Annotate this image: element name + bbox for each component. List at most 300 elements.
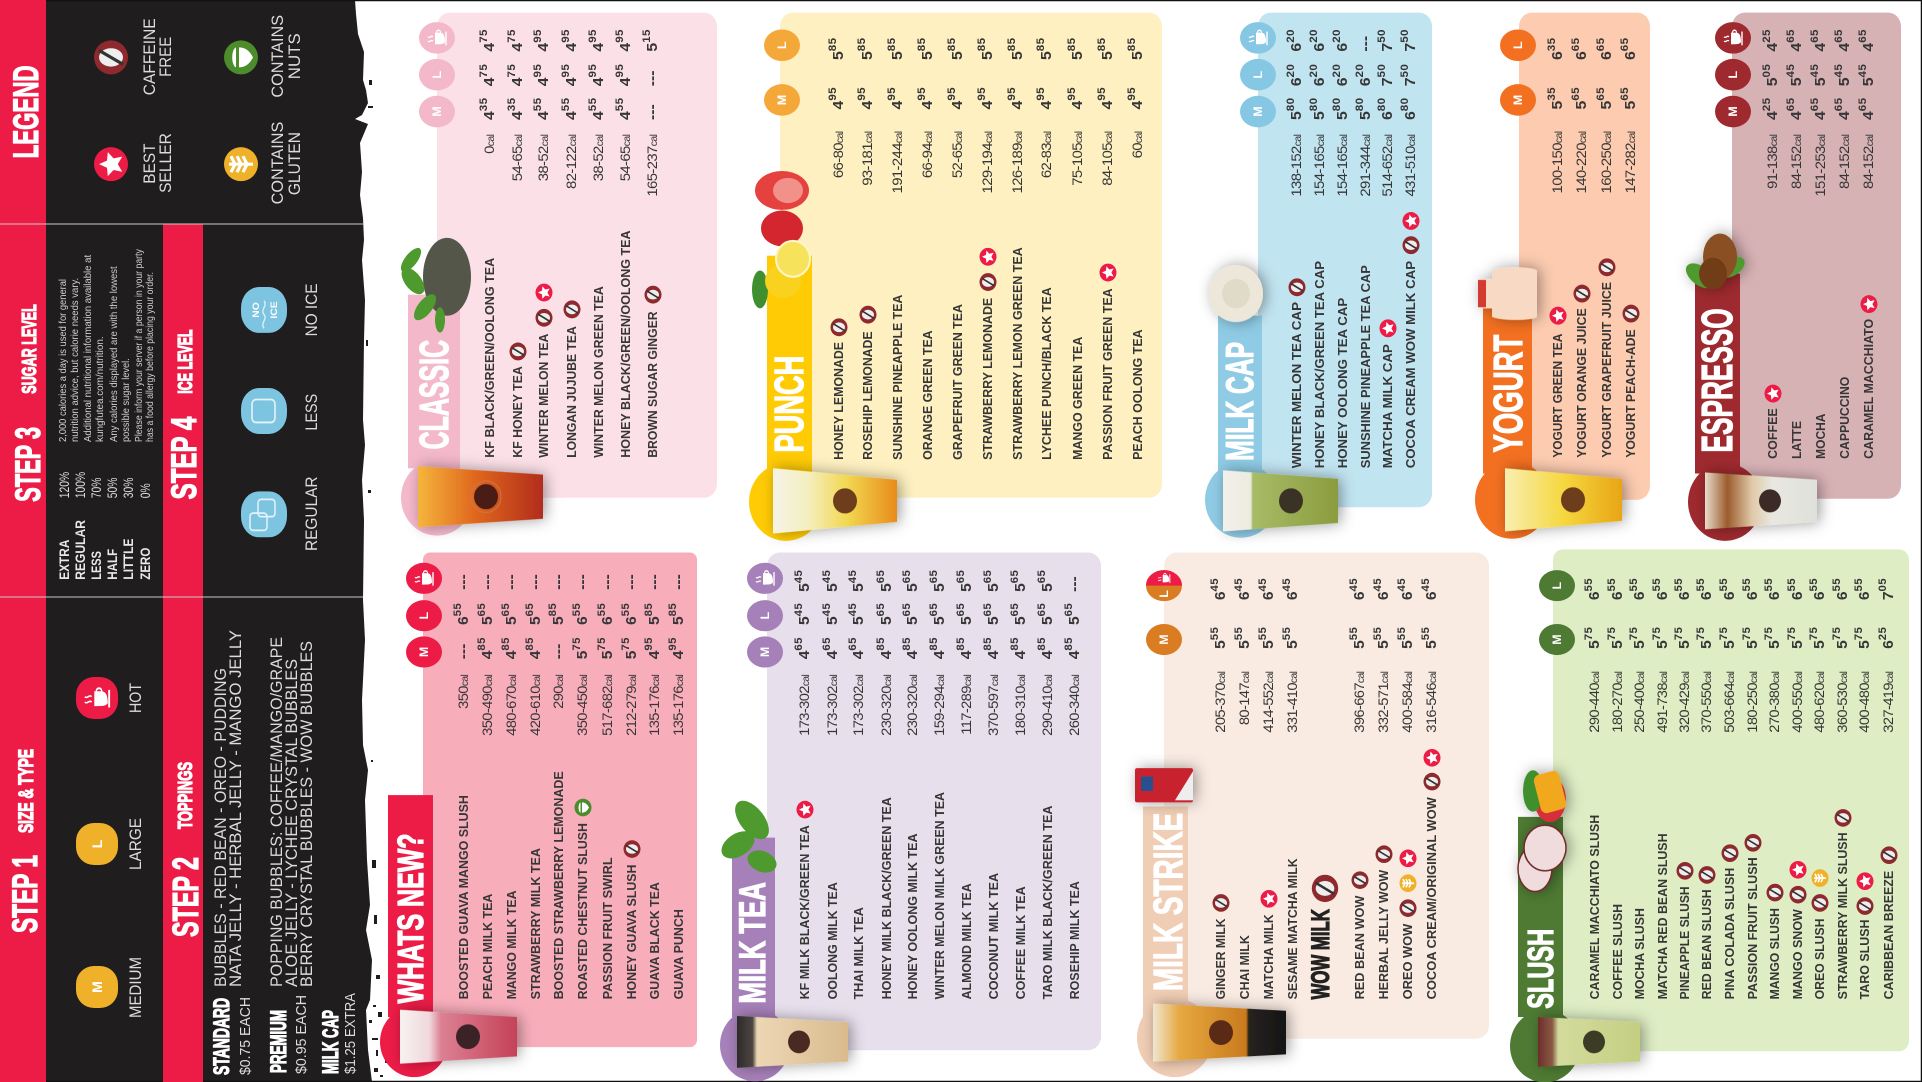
row: red bean wow: 396-667cal — [1352, 671, 1368, 733]
row: honey milk black green tea: 85 — [875, 637, 887, 651]
row: pineapple slush: 55 — [1673, 578, 1685, 591]
row: coffee: 4 — [1764, 43, 1781, 52]
row: yogurt green tea: 6 — [1549, 51, 1566, 60]
row: passion fruit slush: 75 — [1741, 627, 1753, 640]
row: cocoa cream wow milk cap: 7 — [1402, 78, 1419, 86]
row: rosehip lemonade: 85 — [856, 37, 868, 51]
row: strawberry lemonade: 129-194cal — [980, 131, 996, 193]
nutrition note: Please inform your server if a person in your party — [134, 249, 145, 442]
row: cocoa cream original wow: 6 — [1423, 591, 1440, 600]
row: winter melon milk green tea: 65 — [928, 603, 940, 616]
row: cocoa cream wow milk cap: 50 — [1399, 29, 1411, 43]
row: peach milk tea: 4 — [479, 651, 496, 659]
row: caribbean breeze — [1877, 578, 1898, 999]
row: matcha red bean slush: 6 — [1654, 591, 1671, 600]
row: honey lemonade: 66-80cal — [831, 131, 847, 178]
row: longan jujube tea: 95 — [560, 64, 572, 78]
row: sesame matcha milk: 45 — [1281, 578, 1293, 591]
row: caramel macchiato — [1857, 29, 1878, 459]
row: caribbean breeze: 7 — [1880, 591, 1897, 600]
card background — [437, 13, 717, 498]
row: passion fruit green tea: 5 — [1099, 51, 1116, 60]
row: kf honey tea — [506, 29, 526, 458]
row: sesame matcha milk: 5 — [1284, 640, 1301, 649]
label: caffeine free: FREE — [155, 37, 175, 77]
row: taro milk black green tea: 290-410cal — [1040, 674, 1056, 736]
row: oreo wow: 45 — [1396, 578, 1408, 591]
row: taro milk black green tea: 85 — [1036, 637, 1048, 651]
row: taro milk black green tea: 5 — [1039, 616, 1056, 625]
title band — [380, 795, 448, 1077]
row: winter melon tea: 95 — [532, 29, 544, 43]
row: kf milk black green tea: 4 — [796, 651, 813, 659]
row: kf honey tea: 4 — [509, 78, 526, 86]
row: longan jujube tea: 95 — [560, 29, 572, 43]
row: honey milk black green tea: 65 — [875, 603, 887, 616]
row: honey oolong tea cap: 154-165cal — [1335, 134, 1351, 197]
row: winter melon green tea: 4 — [590, 43, 607, 52]
row: cappuccino: 65 — [1833, 29, 1845, 43]
row: guava black tea: 135-176cal — [647, 674, 663, 736]
row: boosted guava mango slush — [452, 574, 472, 999]
size badges: L — [1251, 70, 1265, 79]
row: sesame matcha milk: 331-410cal — [1285, 671, 1301, 733]
row: herbal jelly wow: 55 — [1372, 627, 1384, 640]
row: strawberry lemon green tea: 126-189cal — [1010, 131, 1026, 193]
row: grapefruit green tea: 85 — [946, 37, 958, 51]
row: mango slush: 270-380cal — [1767, 671, 1783, 733]
row: winter melon milk green tea: 65 — [928, 570, 940, 583]
row: honey oolong milk tea: 65 — [901, 603, 913, 616]
row: latte: 65 — [1785, 97, 1797, 111]
row: strawberry milk tea: 5 — [527, 616, 544, 625]
ingredient: coffee beans — [1682, 234, 1748, 293]
panel: yogurt — [1475, 13, 1650, 539]
row: winter melon tea cap: 80 — [1285, 97, 1297, 111]
row: cocoa cream wow milk cap: 6 — [1402, 111, 1419, 120]
row: pineapple slush: 6 — [1676, 591, 1693, 600]
row: passion fruit swirl — [596, 574, 616, 999]
row: pina colada slush: 503-664cal — [1722, 671, 1738, 733]
row: oreo slush: 480-620cal — [1812, 671, 1828, 733]
row: winter melon milk green tea: 5 — [931, 616, 948, 625]
row: cocoa cream original wow: 5 — [1423, 640, 1440, 649]
row: honey black green tea cap — [1308, 29, 1328, 468]
row: kf milk black green tea: 45 — [793, 603, 805, 616]
row: honey guava slush: HONEY GUAVA SLUSH — [624, 865, 639, 999]
heading: step 1: STEP 1 — [6, 855, 45, 933]
row: taro slush: 55 — [1853, 578, 1865, 591]
row: passion fruit swirl: 5 — [599, 651, 616, 659]
row: winter melon tea cap: 20 — [1285, 64, 1297, 78]
row: lychee punch black tea: 62-83cal — [1039, 131, 1055, 178]
row: yogurt orange juice: YOGURT ORANGE JUICE — [1574, 308, 1589, 458]
row: matcha milk: 6 — [1260, 591, 1277, 600]
row: coffee milk tea: 85 — [1009, 637, 1021, 651]
row: honey lemonade: 85 — [827, 37, 839, 51]
row: passion fruit green tea: 85 — [1096, 37, 1108, 51]
row: winter melon tea: 95 — [532, 64, 544, 78]
row: mocha: 65 — [1809, 97, 1821, 111]
title: PUNCH — [766, 356, 812, 452]
row: coconut milk tea: 65 — [982, 570, 994, 583]
row: oolong milk tea: 173-302cal — [825, 674, 841, 736]
row: peach milk tea: 350-490cal — [480, 674, 496, 736]
row: mango milk tea: 65 — [500, 603, 512, 616]
row: guava punch: 4 — [670, 651, 687, 659]
row: guava black tea: 4 — [646, 651, 663, 659]
row: strawberry milk slush: 55 — [1831, 578, 1843, 591]
card background — [1164, 552, 1489, 1039]
row: honey oolong tea cap: 5 — [1334, 111, 1351, 120]
row: rosehip lemonade — [856, 37, 876, 460]
row: boosted guava mango slush: 55 — [452, 603, 464, 616]
row: almond milk tea: 5 — [958, 616, 975, 625]
item list — [827, 37, 1146, 460]
row: sunshine pineapple tea: SUNSHINE PINEAPPLE TEA — [890, 294, 905, 460]
row: longan jujube tea — [560, 29, 580, 458]
row: cappuccino: CAPPUCCINO — [1837, 377, 1852, 459]
drink cup — [737, 1016, 848, 1068]
row: kf honey tea: 35 — [506, 97, 518, 111]
row: sunshine pineapple tea cap: 80 — [1354, 97, 1366, 111]
row: matcha milk: MATCHA MILK — [1261, 914, 1276, 999]
row: oolong milk tea: 5 — [824, 583, 841, 592]
row: honey oolong tea cap: 6 — [1334, 78, 1351, 86]
row: caribbean breeze: 327-419cal — [1881, 671, 1897, 733]
row: guava punch — [667, 574, 687, 999]
ingredient: tea leaves — [717, 795, 780, 877]
row: passion fruit green tea: 95 — [1096, 87, 1108, 101]
row: mocha slush: 250-400cal — [1632, 671, 1648, 733]
row: thai milk tea: 45 — [847, 570, 859, 583]
row: winter melon green tea: 38-52cal — [591, 134, 607, 181]
row: red bean slush: 5 — [1698, 640, 1715, 649]
size badges: M — [1511, 95, 1525, 105]
row: yogurt orange juice: 5 — [1573, 101, 1590, 109]
row: herbal jelly wow: HERBAL JELLY WOW — [1376, 869, 1391, 999]
row: oolong milk tea: 45 — [821, 570, 833, 583]
row: oreo slush: 6 — [1811, 591, 1828, 600]
row: taro milk black green tea: TARO MILK BLACK/GREEN TEA — [1040, 805, 1055, 999]
row: taro milk black green tea: 65 — [1036, 603, 1048, 616]
row: guava black tea: 5 — [646, 616, 663, 625]
row: grapefruit green tea: 95 — [946, 87, 958, 101]
row: oreo wow — [1396, 578, 1416, 999]
row: almond milk tea: 117-289cal — [959, 674, 975, 735]
item list — [1583, 578, 1898, 999]
row: cocoa cream original wow: 316-546cal — [1424, 671, 1440, 733]
row: thai milk tea — [847, 570, 867, 999]
panel: milk cap — [1205, 13, 1432, 538]
row: cappuccino: 65 — [1833, 97, 1845, 111]
row: yogurt grapefruit juice: 6 — [1598, 51, 1615, 60]
row: mango milk tea: 4 — [503, 651, 520, 659]
size badges — [747, 563, 783, 668]
row: matcha red bean slush — [1651, 578, 1671, 999]
row: honey black green tea cap: 80 — [1308, 97, 1320, 111]
drink cup — [1223, 470, 1338, 531]
sugar level table: 100% — [73, 472, 89, 498]
row: honey lemonade — [827, 37, 848, 460]
row: honey guava slush: 6 — [623, 616, 640, 625]
row: passion fruit slush: PASSION FRUIT SLUSH — [1745, 857, 1760, 999]
size badges — [764, 29, 800, 116]
row: guava punch: --- — [670, 574, 687, 590]
row: chai milk: 80-147cal — [1237, 671, 1253, 725]
row: roasted chestnut slush: 55 — [571, 603, 583, 616]
row: coffee slush: 180-270cal — [1610, 671, 1626, 733]
row: passion fruit slush: 55 — [1741, 578, 1753, 591]
row: coffee: 5 — [1764, 78, 1781, 86]
panel: milk strike — [1135, 552, 1489, 1077]
row: mango snow: 75 — [1786, 627, 1798, 640]
row: mango green tea: 95 — [1066, 87, 1078, 101]
icon: no ice: NO — [252, 302, 262, 318]
row: roasted chestnut slush: 350-450cal — [575, 674, 591, 736]
row: cocoa cream wow milk cap: 7 — [1402, 43, 1419, 52]
row: peach milk tea: PEACH MILK TEA — [480, 893, 495, 999]
size badges: L — [758, 611, 772, 619]
row: thai milk tea: 65 — [847, 637, 859, 651]
row: oreo wow: 400-584cal — [1400, 671, 1416, 733]
row: rosehip milk tea — [1063, 576, 1083, 999]
panel: espresso — [1682, 13, 1901, 541]
size badges: M — [758, 647, 772, 657]
row: yogurt peach-ade: 65 — [1619, 37, 1631, 51]
row: coffee: 25 — [1761, 97, 1773, 111]
row: matcha red bean slush: 55 — [1651, 578, 1663, 591]
ingredient: tea leaves — [397, 238, 471, 333]
row: strawberry lemonade: 85 — [976, 37, 988, 51]
red strip: second level headers — [163, 224, 203, 1082]
row: matcha milk cap: 80 — [1376, 97, 1388, 111]
row: rosehip lemonade: 5 — [859, 51, 876, 60]
size badges: L — [1550, 581, 1564, 589]
row: peach oolong tea — [1126, 37, 1146, 460]
size labels — [126, 683, 145, 1018]
item list — [478, 29, 662, 458]
row: strawberry milk tea — [524, 574, 544, 999]
row: coconut milk tea: 5 — [985, 616, 1002, 625]
row: kf black green oolong tea — [478, 29, 498, 458]
panel: slush — [1510, 549, 1909, 1082]
row: kf milk black green tea: 173-302cal — [797, 674, 813, 736]
row: guava punch: 95 — [667, 637, 679, 651]
sugar level table: ZERO — [138, 547, 154, 580]
row: passion fruit swirl: --- — [599, 574, 616, 590]
row: caribbean breeze: 6 — [1880, 640, 1897, 649]
icon: medium: M — [89, 981, 105, 993]
row: coffee slush — [1606, 578, 1626, 999]
sugar level table: 0% — [138, 483, 154, 498]
icon: no ice: ICE — [270, 301, 280, 319]
card background — [423, 552, 697, 1047]
row: pina colada slush — [1718, 578, 1738, 999]
sugar level table: 50% — [105, 478, 121, 498]
milk cap topping — [318, 993, 359, 1074]
row: honey milk black green tea: HONEY MILK BLACK/GREEN TEA — [879, 797, 894, 999]
label: best seller — [139, 133, 175, 193]
heading: step 4: STEP 4 — [164, 417, 203, 499]
row: peach oolong tea: 85 — [1126, 37, 1138, 51]
size labels: MEDIUM — [126, 957, 145, 1018]
row: coconut milk tea: 85 — [982, 637, 994, 651]
row: passion fruit slush: 180-250cal — [1745, 671, 1761, 733]
row: cocoa cream wow milk cap: COCOA CREAM WOW MILK CAP — [1403, 261, 1418, 468]
row: honey black green oolong tea — [614, 29, 634, 458]
row: oreo slush: OREO SLUSH — [1812, 919, 1827, 999]
row: almond milk tea: 65 — [955, 603, 967, 616]
row: caramel macchiato: 4 — [1860, 111, 1877, 120]
row: mocha slush: 55 — [1628, 578, 1640, 591]
row: boosted strawberry lemonade: --- — [550, 644, 567, 659]
row: red bean wow: 45 — [1348, 578, 1360, 591]
row: strawberry lemon green tea: 4 — [1009, 101, 1026, 109]
ingredient: milk carton — [1135, 768, 1193, 802]
row: mango green tea — [1066, 37, 1086, 460]
title: WHATS NEW? — [391, 833, 431, 1004]
row: yogurt grapefruit juice: 65 — [1595, 87, 1607, 101]
row: yogurt green tea: YOGURT GREEN TEA — [1550, 333, 1565, 458]
size badges: M — [775, 95, 789, 105]
size badges — [1715, 22, 1751, 127]
row: coffee slush: 6 — [1609, 591, 1626, 600]
row: cocoa cream original wow — [1420, 578, 1440, 999]
row: honey black green tea cap: 6 — [1311, 43, 1328, 52]
row: strawberry milk slush — [1831, 578, 1852, 999]
row: coffee milk tea: 5 — [1012, 616, 1029, 625]
row: oolong milk tea: OOLONG MILK TEA — [825, 882, 840, 999]
row: sesame matcha milk: 6 — [1284, 591, 1301, 600]
row: honey milk black green tea: 4 — [878, 651, 895, 659]
size badges: M — [1550, 634, 1564, 645]
title: ESPRESSO — [1692, 308, 1742, 452]
drink cup — [418, 466, 543, 527]
row: mango snow: MANGO SNOW — [1790, 909, 1805, 999]
size badges: M — [417, 647, 431, 657]
icon: medium — [76, 966, 118, 1008]
size badges: L — [1511, 41, 1525, 49]
standard toppings: $0.75 EACH — [237, 997, 254, 1075]
row: mocha slush — [1628, 578, 1648, 999]
row: winter melon milk green tea: 159-294cal — [932, 674, 948, 736]
row: honey black green tea cap: 154-165cal — [1312, 134, 1328, 197]
row: coffee: COFFEE — [1765, 408, 1780, 459]
row: kf black green oolong tea: KF BLACK/GREEN/OOLONG TEA — [482, 257, 497, 458]
row: kf milk black green tea: 5 — [796, 583, 813, 592]
row: matcha milk: 414-552cal — [1261, 671, 1277, 733]
row: honey oolong milk tea: 230-320cal — [905, 674, 921, 736]
row: passion fruit slush — [1741, 578, 1762, 999]
row: coffee slush: COFFEE SLUSH — [1610, 904, 1625, 999]
row: coconut milk tea: 4 — [985, 651, 1002, 659]
row: mango snow: 55 — [1786, 578, 1798, 591]
label: contains gluten: GLUTEN — [284, 132, 304, 195]
row: cappuccino — [1833, 29, 1853, 459]
row: latte: 45 — [1785, 64, 1797, 78]
row: taro slush: 5 — [1856, 640, 1873, 649]
row: caramel macchiato slush: 6 — [1586, 591, 1603, 600]
row: coffee milk tea: 65 — [1009, 603, 1021, 616]
row: boosted strawberry lemonade: --- — [550, 574, 567, 590]
row: honey milk black green tea: 230-320cal — [879, 674, 895, 736]
row: coffee milk tea: COFFEE MILK TEA — [1013, 886, 1028, 999]
premium toppings: PREMIUM — [266, 1010, 291, 1073]
ice labels: LESS — [301, 394, 321, 431]
row: orange green tea — [916, 37, 936, 460]
row: strawberry milk tea: 420-610cal — [528, 674, 544, 736]
row: red bean wow — [1348, 578, 1368, 999]
row: kf honey tea: KF HONEY TEA — [510, 366, 525, 458]
icon: wow milk caffeine free — [1312, 875, 1338, 902]
panel: legend — [6, 15, 304, 204]
size badges — [1146, 570, 1182, 655]
row: honey guava slush — [620, 574, 640, 999]
row: rosehip lemonade: 95 — [856, 87, 868, 101]
row: peach oolong tea: 5 — [1129, 51, 1146, 60]
row: strawberry lemonade — [976, 37, 996, 460]
row: kf black green oolong tea: 4 — [481, 43, 498, 52]
row: coffee: 4 — [1764, 111, 1781, 120]
row: passion fruit swirl: 75 — [596, 637, 608, 651]
row: mocha slush: 6 — [1631, 591, 1648, 600]
row: sesame matcha milk — [1281, 578, 1301, 999]
row: cocoa cream original wow: 45 — [1420, 578, 1432, 591]
row: mocha: 4 — [1812, 43, 1829, 52]
title: MILK TEA — [732, 882, 773, 1004]
row: sunshine pineapple tea cap: --- — [1357, 36, 1374, 52]
row: strawberry milk tea: 85 — [524, 637, 536, 651]
row: coffee slush: 5 — [1609, 640, 1626, 649]
size badges: L — [430, 70, 444, 79]
panel: step 4 ice level — [164, 284, 321, 551]
row: sunshine pineapple tea: 5 — [889, 51, 906, 60]
panel: step 2 toppings — [165, 630, 359, 1075]
row: thai milk tea: 45 — [847, 603, 859, 616]
row: winter melon milk green tea: 4 — [931, 651, 948, 659]
row: yogurt grapefruit juice: 5 — [1598, 101, 1615, 109]
size badges: M — [1251, 106, 1265, 117]
row: thai milk tea: 5 — [850, 583, 867, 592]
row: kf black green oolong tea: 35 — [478, 97, 490, 111]
card background — [767, 552, 1101, 1050]
row: honey guava slush: 212-279cal — [624, 674, 640, 736]
subheading: wow milk: WOW MILK — [1307, 909, 1335, 999]
row: boosted strawberry lemonade: 85 — [547, 603, 559, 616]
row: matcha milk cap — [1376, 29, 1396, 468]
icon: caffeine free — [94, 40, 128, 74]
row: lychee punch black tea: LYCHEE PUNCH/BLACK TEA — [1039, 287, 1054, 460]
title: CLASSIC — [411, 340, 457, 449]
row: grapefruit green tea: 5 — [949, 51, 966, 60]
row: honey oolong tea cap: HONEY OOLONG TEA CAP — [1335, 298, 1350, 468]
row: kf milk black green tea: KF MILK BLACK/GREEN TEA — [797, 825, 812, 999]
row: strawberry lemon green tea: STRAWBERRY LEMON GREEN TEA — [1010, 247, 1025, 460]
row: oolong milk tea: 45 — [821, 603, 833, 616]
row: honey oolong tea cap: 80 — [1331, 97, 1343, 111]
row: winter melon milk green tea: WINTER MELON MILK GREEN TEA — [932, 792, 947, 999]
row: chai milk: 5 — [1236, 640, 1253, 649]
row: sunshine pineapple tea: 191-244cal — [890, 131, 906, 193]
row: strawberry lemon green tea: 95 — [1006, 87, 1018, 101]
row: strawberry milk tea: STRAWBERRY MILK TEA — [528, 848, 543, 999]
row: cocoa cream original wow: COCOA CREAM/ORIGINAL WOW — [1424, 797, 1439, 999]
row: honey black green oolong tea: HONEY BLACK/GREEN/OOLONG TEA — [618, 230, 633, 458]
row: mango slush: 75 — [1763, 627, 1775, 640]
heading: toppings: TOPPINGS — [175, 762, 197, 829]
row: matcha milk: 55 — [1257, 627, 1269, 640]
